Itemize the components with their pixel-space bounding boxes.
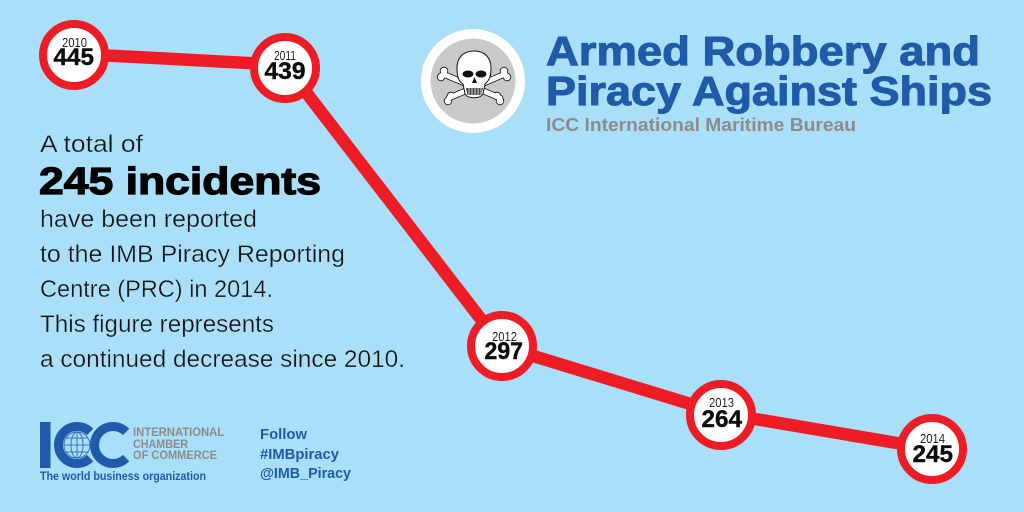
social follow text: Follow: [260, 426, 307, 443]
data point: 2013: 2013: [709, 395, 734, 410]
data point: 2010: [43, 24, 105, 86]
data point: 2012: 2012: [492, 329, 517, 344]
title: [546, 28, 992, 114]
subtitle: ICC International Maritime Bureau: [546, 115, 856, 135]
trend line: [74, 54, 932, 449]
text block: summary: This figure represents: [40, 311, 274, 338]
text block: summary: a continued decrease since 2010.: [40, 346, 405, 373]
logo: ICC: INTERNATIONAL: [133, 427, 224, 439]
data point: 2011: 439: [264, 58, 306, 85]
data point: 2010: 445: [54, 44, 94, 71]
data point: 2014: [901, 418, 963, 480]
logo: ICC: [40, 422, 227, 483]
text block: summary: to the IMB Piracy Reporting: [40, 241, 345, 268]
logo: ICC: The world business organization: [40, 471, 206, 483]
data point: 2014: 2014: [920, 431, 945, 446]
text block: summary: A total of: [40, 131, 143, 158]
data point: 2012: [471, 315, 533, 377]
text block: summary: have been reported: [40, 206, 257, 233]
text block: summary: Centre (PRC) in 2014.: [40, 276, 273, 303]
social follow text: @IMB_Piracy: [260, 465, 352, 482]
text block: summary: 245 incidents: [39, 161, 321, 203]
social follow text: [260, 426, 352, 482]
title: Armed Robbery and: [546, 28, 980, 74]
logo: ICC: CHAMBER: [133, 439, 189, 451]
social follow text: #IMBpiracy: [260, 446, 340, 463]
data point: 2012: 297: [484, 338, 523, 365]
data point: 2014: 245: [912, 441, 953, 468]
title: Piracy Against Ships: [546, 68, 992, 114]
data point: 2013: 264: [702, 406, 743, 433]
data point: 2011: 2011: [274, 48, 296, 63]
data point: 2010: 2010: [62, 35, 87, 50]
data point: 2011: [254, 37, 316, 99]
text block: summary: [39, 131, 405, 373]
logo: ICC: OF COMMERCE: [133, 450, 217, 462]
data point: 2013: [690, 384, 752, 446]
icon: skull and crossbones: [421, 29, 525, 133]
